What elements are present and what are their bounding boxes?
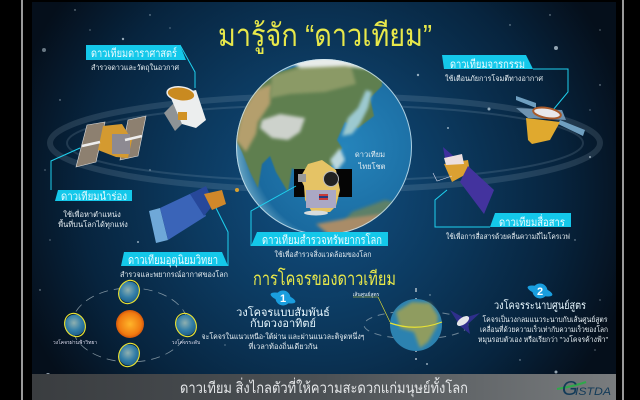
panel: spy satellite: ดาวเทียมจารกรรม — [450, 58, 525, 71]
panel: orbit 1: ที่เวลาท้องถิ่นเดียวกัน — [248, 341, 318, 351]
panel: orbit 1: วงโคจรแบบสัมพันธ์ — [236, 305, 330, 319]
panel: spy satellite: ใช้เตือนภัยการโจมตีทางอากาศ — [445, 74, 543, 83]
footer bar — [32, 374, 616, 400]
icon: sun — [116, 310, 144, 338]
diagram: equatorial orbit: เส้นศูนย์สูตร — [353, 291, 380, 298]
panel: meteorological satellite: สำรวจและพยากรณ์อากาศของโลก — [120, 270, 228, 279]
panel: communications satellite — [433, 147, 571, 241]
orbit rings — [50, 96, 600, 190]
panel: orbit 1: กับดวงอาทิตย์ — [250, 317, 316, 330]
panel: orbit 1 — [202, 290, 364, 351]
panel: orbit 1: จะโคจรในแนวเหนือ-ใต้ผ่าน และผ่านแนวละติจูดหนึ่งๆ — [202, 331, 364, 341]
title: มารู้จัก “ดาวเทียม” — [218, 18, 432, 54]
panel: earth observation satellite: ดาวเทียมสำรวจทรัพยากรโลก — [262, 233, 382, 247]
logo: GISTDA — [557, 378, 611, 400]
panel: meteorological satellite: ดาวเทียมอุตุนิยมวิทยา — [128, 253, 218, 268]
logo: GISTDA: G — [562, 378, 578, 400]
icon: badge 1: 1 — [280, 293, 286, 305]
label: Thaichote: ไทยโชต — [357, 162, 386, 171]
icon: Thaichote satellite mascot — [294, 160, 352, 216]
panel: orbit 2: หมุนรอบตัวเอง หรือเรียกว่า "วงโคจรค้างฟ้า" — [478, 335, 608, 344]
panel: astronomy satellite — [86, 45, 206, 131]
panel: earth observation satellite — [251, 186, 388, 259]
icon: satellite — [450, 310, 480, 334]
label: Thaichote — [355, 150, 386, 171]
icon: earth right — [172, 310, 200, 340]
diagram: sun-synchronous orbit: วงโคจรระดับ — [172, 339, 200, 346]
panel: orbit 2: วงโคจรระนาบศูนย์สูตร — [494, 298, 586, 312]
heading: orbits: การโคจรของดาวเทียม — [253, 267, 396, 290]
icon: spy satellite — [516, 96, 585, 144]
icon: earth — [390, 299, 442, 351]
panel: astronomy satellite: ดาวเทียมดาราศาสตร์ — [91, 46, 177, 60]
panel: navigation satellite: ดาวเทียมนำร่อง — [61, 190, 127, 203]
icon: badge 1 — [269, 290, 297, 306]
icon: navigation satellite — [76, 116, 146, 167]
panel: meteorological satellite — [120, 186, 239, 279]
panel: navigation satellite: พื้นที่บนโลกได้ทุกแห่ง — [58, 219, 128, 229]
diagram: sun-synchronous orbit: วงโคจรผ่านฟ้าวิทยา — [53, 339, 97, 346]
diagram: equatorial orbit — [353, 288, 480, 360]
icon: astronomy satellite — [164, 85, 206, 131]
panel: orbit 2 — [478, 283, 608, 344]
panel: navigation satellite — [51, 116, 146, 229]
panel: communications satellite: ใช้เพื่อการสื่อสารด้วยคลื่นความถี่ไมโครเวฟ — [446, 231, 570, 241]
globe — [236, 56, 412, 240]
diagram: sun-synchronous orbit — [53, 277, 200, 370]
icon: badge 2: 2 — [537, 286, 543, 298]
footer bar: ดาวเทียม สิ่งไกลตัวที่ให้ความสะดวกแก่มนุษย์ทั้งโลก — [180, 377, 468, 398]
icon: earth bottom — [115, 340, 143, 370]
logo: GISTDA: ISTDA — [575, 386, 611, 398]
panel: earth observation satellite: ใช้เพื่อสำรวจสิ่งแวดล้อมของโลก — [274, 249, 372, 259]
icon: meteorological satellite — [149, 186, 239, 243]
panel: communications satellite: ดาวเทียมสื่อสาร — [499, 214, 565, 229]
icon: earth left — [61, 310, 89, 340]
panel: orbit 2: เคลื่อนที่ด้วยความเร็วเท่ากับความเร็วของโลก — [480, 324, 608, 334]
icon: communications satellite — [433, 147, 494, 214]
panel: navigation satellite: ใช้เพื่อหาตำแหน่ง — [63, 209, 121, 219]
label: Thaichote: ดาวเทียม — [355, 150, 385, 159]
panel: orbit 2: โคจรเป็นวงกลมแนวระนาบกับเส้นศูนย์สูตร — [482, 314, 608, 324]
panel: spy satellite — [442, 55, 585, 144]
panel: astronomy satellite: สำรวจดาวและวัตถุในอวกาศ — [91, 63, 179, 72]
icon: earth top — [115, 277, 143, 307]
